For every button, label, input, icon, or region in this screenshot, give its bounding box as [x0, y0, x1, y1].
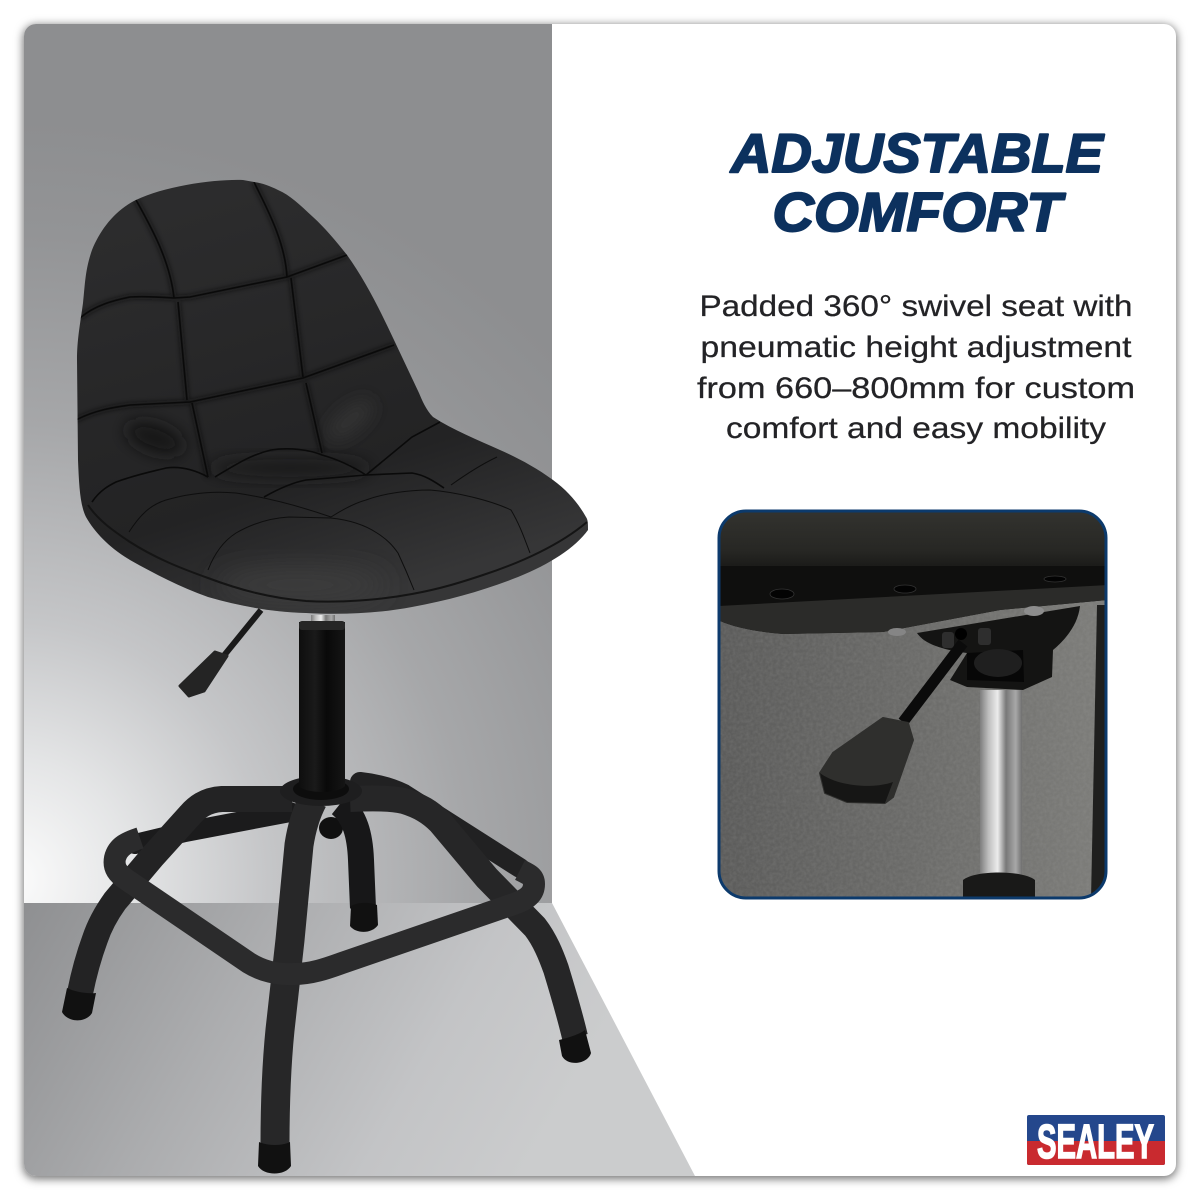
wall backdrop [24, 24, 552, 904]
inset border [719, 511, 1106, 898]
left foot [62, 988, 96, 1020]
cushion seams [129, 457, 530, 590]
heading [729, 122, 1105, 243]
lever handle [820, 718, 913, 803]
front foot [258, 1142, 291, 1174]
right foot [559, 1030, 591, 1063]
seat seams soft shadow [76, 182, 394, 477]
body text [697, 290, 1135, 445]
body text: comfort and easy mobility [726, 412, 1106, 445]
gas lift pole [299, 615, 345, 788]
heading: COMFORT [772, 181, 1066, 243]
seat piping [88, 505, 587, 602]
padded seat [76, 180, 588, 614]
lever arm [903, 643, 963, 722]
front leg [275, 800, 313, 1146]
seat underside [718, 510, 1108, 568]
height adjust lever [180, 610, 261, 696]
heading: ADJUSTABLE [729, 122, 1105, 184]
panel: studio backdrop [24, 24, 695, 1176]
seat shading [124, 404, 368, 595]
body text: from 660–800mm for custom [697, 372, 1135, 405]
swivel mechanism [917, 606, 1080, 690]
photo backdrop [720, 600, 1104, 896]
floor [24, 903, 695, 1176]
chrome pole [980, 690, 1022, 888]
stool base back parts [135, 782, 520, 908]
body text: pneumatic height adjustment [700, 331, 1132, 364]
product photo: stool [62, 180, 591, 1174]
body text: Padded 360° swivel seat with [700, 290, 1132, 323]
mounting plate [718, 566, 1108, 634]
hub flange [280, 770, 362, 806]
pole collar [963, 872, 1035, 896]
left and right legs [80, 798, 575, 1037]
foot ring front [115, 838, 534, 974]
inset photo: lever detail [718, 510, 1108, 900]
back foot [350, 903, 378, 932]
seat seams [76, 182, 444, 502]
